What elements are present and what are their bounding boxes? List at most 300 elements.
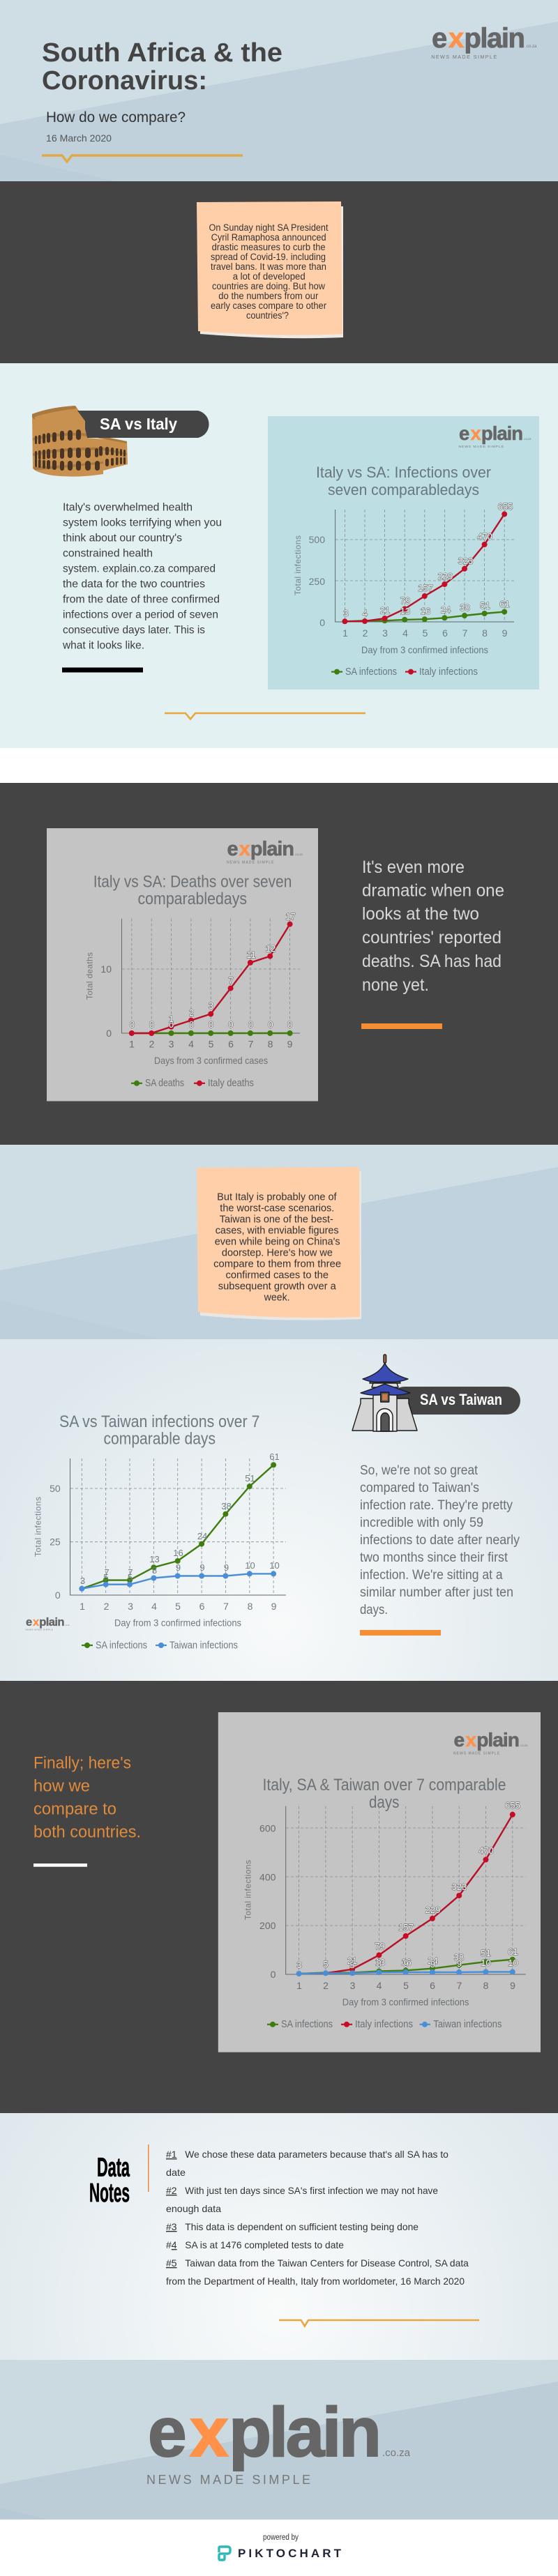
icon: Taiwan memorial hall (352, 1355, 417, 1431)
data labels: 0 (130, 1019, 135, 1030)
chart title: SA vs Taiwan infections over 7 (59, 1412, 259, 1431)
line: Italy infections (299, 1812, 515, 1974)
axis labels: 5 (423, 627, 428, 639)
notes list: from the Department of Health, Italy from worldometer, 16 March 2020 (166, 2276, 465, 2287)
notes list (166, 2149, 469, 2287)
note text (213, 1192, 341, 1304)
axis labels: 7 (248, 1039, 254, 1050)
chart: SA vs Taiwan infections (26, 1412, 286, 1651)
body text: Italy: consecutive days later. This is (63, 625, 205, 636)
data labels: 61 (508, 1946, 518, 1957)
data labels: 470 (478, 1845, 494, 1856)
body text: deaths: looks at the two (362, 904, 479, 924)
logo: explain chart 2: e (227, 838, 239, 860)
title: South Africa & the (42, 38, 282, 68)
data labels: 9 (199, 1562, 205, 1573)
body text: deaths (362, 858, 504, 995)
axis labels: 1 (296, 1980, 302, 1991)
body text: Taiwan: So, we're not so great (360, 1463, 478, 1478)
body text: deaths: countries' reported (362, 928, 502, 947)
axis labels: 9 (510, 1980, 515, 1991)
axis labels: 8 (268, 1039, 273, 1050)
axis labels: 500 (309, 534, 325, 545)
body text: finally (33, 1754, 141, 1841)
logo: explain chart 2: x (239, 838, 250, 860)
axis labels: Total deaths (85, 952, 95, 1000)
data labels: 10 (508, 1958, 518, 1968)
notes list: SA is at 1476 completed tests to date (185, 2239, 344, 2250)
logo: explain large: .co.za (382, 2447, 411, 2459)
axis labels: 1 (129, 1039, 135, 1050)
axis labels: 5 (403, 1980, 409, 1991)
body text: Taiwan: days. (360, 1603, 388, 1617)
legend: SA deaths (145, 1077, 184, 1089)
legend (331, 666, 478, 678)
data labels: 0 (287, 1019, 292, 1030)
data labels: 323 (452, 1882, 467, 1892)
logo: explain header: plain (464, 23, 525, 54)
data labels: 0 (149, 1019, 154, 1030)
logo: explain chart 2 (227, 838, 303, 865)
axis labels (243, 1822, 515, 2008)
chart title: Italy, SA & Taiwan over 7 comparable (262, 1776, 506, 1794)
chart: Italy vs SA infections (268, 416, 539, 689)
axis labels: 200 (259, 1920, 276, 1931)
notes list: date (166, 2167, 186, 2178)
axis labels: 8 (483, 1980, 489, 1991)
chart title (316, 464, 491, 498)
logo: explain header: e (432, 23, 447, 54)
data labels: 157 (398, 1922, 414, 1933)
legend: Italy infections (355, 2018, 413, 2030)
orange divider (148, 2144, 149, 2192)
body text: Italy: from the date of three confirmed (63, 594, 220, 605)
axis labels: 5 (175, 1601, 181, 1612)
data labels: 323 (458, 556, 473, 566)
panel: Italy vs SA deaths (0, 783, 558, 1145)
axis labels: 3 (350, 1980, 356, 1991)
line: Italy infections (342, 511, 507, 624)
line: Taiwan infections (296, 1969, 515, 1976)
data labels: 24 (441, 604, 451, 615)
data labels: 0 (169, 1019, 174, 1030)
chart title: seven comparabledays (328, 481, 479, 498)
body text: deaths: It's even more (362, 858, 465, 877)
legend: Taiwan infections (433, 2018, 502, 2030)
data labels (343, 501, 513, 618)
note text: countries are doing. But how (212, 281, 325, 291)
logo: explain chart 3 (26, 1615, 70, 1631)
data labels: 9 (430, 1959, 435, 1969)
subtitle: How do we compare? (46, 109, 186, 125)
data labels: 7 (128, 1567, 133, 1578)
axis labels: 6 (228, 1039, 234, 1050)
logo: explain chart 3: NEWS MADE SIMPLE (26, 1629, 53, 1631)
panel: both countries (0, 1681, 558, 2113)
note text: do the numbers from our (218, 291, 319, 301)
logo: explain chart 3: .co.za (65, 1624, 70, 1626)
data labels: 7 (104, 1567, 110, 1578)
data labels: 51 (480, 600, 490, 611)
note text: doorstep. Here's how we (222, 1248, 333, 1259)
legend (267, 2018, 502, 2030)
data labels: 51 (245, 1473, 255, 1484)
data labels: 79 (375, 1941, 385, 1951)
axis labels: 0 (55, 1590, 61, 1601)
data labels: 16 (173, 1548, 183, 1558)
logo: explain chart 4: NEWS MADE SIMPLE (453, 1751, 500, 1755)
note paper (200, 206, 343, 338)
note text: But Italy is probably one of (217, 1192, 338, 1203)
note text: On Sunday night SA President (209, 222, 329, 233)
data labels: 8 (152, 1565, 157, 1576)
note text: drastic measures to curb the (212, 242, 326, 252)
data labels (80, 1451, 280, 1586)
data labels: 0 (248, 1019, 253, 1030)
orange marker line (165, 713, 365, 719)
pill heading: SA vs Italy: SA vs Italy (100, 415, 177, 433)
body text: finally: how we (33, 1776, 90, 1795)
data labels: 38 (454, 1952, 464, 1963)
note text: confirmed cases to the (226, 1270, 329, 1281)
logo: explain large (146, 2393, 411, 2487)
axis labels: 2 (149, 1039, 155, 1050)
data labels: 10 (481, 1958, 491, 1968)
data labels: 0 (209, 1019, 213, 1030)
orange marker line (279, 2320, 479, 2326)
panel: footer logo (0, 2360, 558, 2520)
note text (209, 222, 329, 321)
legend: SA infections (96, 1640, 147, 1651)
body text: Taiwan: similar number after just ten (360, 1585, 513, 1600)
body text: Italy: constrained health (63, 548, 153, 559)
data labels: 157 (418, 583, 433, 593)
panel: intro note section (0, 181, 558, 363)
axis labels: 0 (271, 1969, 276, 1980)
logo: explain chart 3: e (26, 1615, 32, 1629)
axis labels (293, 534, 508, 655)
body text: finally: both countries. (33, 1822, 141, 1841)
black bar (62, 668, 143, 672)
axis labels: 3 (169, 1039, 174, 1050)
axis labels: 4 (151, 1601, 157, 1612)
axis labels: 4 (188, 1039, 194, 1050)
note text: even while being on China's (215, 1237, 340, 1248)
data labels: 0 (228, 1019, 234, 1030)
pill heading: SA vs Taiwan (391, 1387, 520, 1415)
legend: SA infections (345, 666, 397, 678)
body text: finally: Finally; here's (33, 1754, 131, 1773)
data labels: 10 (269, 1560, 280, 1571)
logo: explain chart 3: x (33, 1615, 40, 1629)
data labels: 3 (343, 608, 349, 618)
data labels: 13 (149, 1554, 160, 1564)
body text: Italy: what it looks like. (62, 640, 144, 651)
data labels: 12 (266, 943, 276, 954)
title (42, 38, 282, 96)
note text: Taiwan is one of the best- (220, 1214, 333, 1226)
line: Taiwan infections (79, 1571, 276, 1592)
orange bar (361, 1023, 442, 1029)
axis labels: 3 (128, 1601, 133, 1612)
data labels: 5 (128, 1572, 133, 1583)
chart: deaths (47, 828, 318, 1102)
chart title: comparable days (103, 1430, 216, 1449)
chart title: Italy vs SA: Deaths over seven (93, 873, 292, 892)
axis labels: 7 (223, 1601, 229, 1612)
axis labels: 400 (259, 1871, 276, 1882)
data labels: 7 (228, 975, 234, 986)
panel: SA vs Italy (0, 363, 558, 748)
axis labels: 600 (259, 1822, 276, 1834)
data labels: 16 (421, 606, 430, 616)
data labels: 21 (380, 605, 390, 616)
logo: explain large: x (190, 2393, 229, 2471)
panel: SA vs Taiwan (0, 1339, 558, 1681)
data labels (130, 911, 296, 1030)
body text: Italy: Italy's overwhelmed health (63, 502, 193, 513)
logo: explain chart 1: x (470, 422, 481, 444)
line: SA deaths (132, 1030, 293, 1036)
logo: explain header (431, 23, 537, 60)
panel: piktochart footer (0, 2520, 558, 2576)
logo: explain chart 4: x (465, 1728, 476, 1751)
axis labels: Total infections (33, 1497, 43, 1557)
axis labels: 6 (199, 1601, 205, 1612)
body text: Italy (62, 502, 222, 651)
line: Italy deaths (129, 922, 293, 1036)
axis labels: 7 (462, 627, 468, 639)
data labels: 3 (296, 1960, 302, 1970)
data labels: 655 (498, 501, 513, 512)
body text: Italy: think about our country's (63, 533, 182, 544)
logo: explain chart 4: e (453, 1728, 465, 1751)
body text: deaths: deaths. SA has had (362, 952, 502, 971)
logo: explain large: plain (229, 2393, 379, 2471)
axis labels: 2 (323, 1980, 329, 1991)
data labels: 4 (363, 608, 368, 618)
data labels: 61 (499, 599, 510, 609)
orange bar (360, 1630, 441, 1636)
body text: Taiwan (360, 1463, 520, 1617)
axis labels: 1 (342, 627, 348, 639)
legend (131, 1077, 254, 1089)
logo: explain header: .co.za (525, 45, 537, 49)
note text: compare to them from three (213, 1259, 341, 1270)
white bar (33, 1864, 87, 1867)
data labels: 1 (169, 1014, 174, 1024)
logo: explain chart 2: plain (250, 838, 294, 860)
legend (82, 1640, 238, 1651)
data labels: 0 (268, 1019, 273, 1030)
data labels: 10 (245, 1560, 255, 1571)
data labels: 21 (347, 1956, 357, 1966)
logo: explain large: NEWS MADE SIMPLE (146, 2473, 310, 2487)
panel: header (0, 0, 558, 181)
body text: Taiwan: infection rate. They're pretty (360, 1498, 513, 1513)
axis labels: Days from 3 confirmed cases (154, 1055, 268, 1066)
pill heading: SA vs Taiwan: SA vs Taiwan (420, 1391, 502, 1408)
data labels: 38 (221, 1501, 232, 1511)
body text: Taiwan: two months since their first (360, 1550, 508, 1565)
data labels (296, 1800, 520, 1970)
note text: a lot of developed (233, 271, 306, 282)
note text: the worst-case scenarios. (220, 1203, 334, 1214)
data labels: 17 (285, 911, 296, 922)
logo: explain header: NEWS MADE SIMPLE (431, 54, 497, 60)
data labels: 13 (400, 606, 410, 616)
chart title: comparabledays (138, 890, 247, 908)
panel: data notes (0, 2113, 558, 2360)
data labels: 5 (103, 1572, 109, 1583)
legend: Italy infections (419, 666, 478, 678)
logo: explain chart 1: e (459, 422, 469, 444)
chart title (262, 1776, 506, 1812)
body text: Italy: the data for the two countries (63, 579, 205, 590)
icon: piktochart mark (219, 2547, 230, 2560)
line: SA infections (345, 609, 507, 623)
powered by: powered by (263, 2533, 299, 2542)
data labels: 61 (269, 1451, 280, 1462)
logo: explain chart 4: .co.za (520, 1744, 528, 1747)
data labels: 229 (425, 1905, 440, 1915)
notes list: #3 (166, 2221, 177, 2232)
legend: Taiwan infections (169, 1640, 238, 1651)
line: SA infections (299, 1957, 515, 1974)
body text: Italy: system looks terrifying when you (63, 517, 222, 528)
data labels: 24 (428, 1956, 438, 1966)
axis labels: 8 (248, 1601, 253, 1612)
axis labels: Day from 3 confirmed infections (114, 1617, 241, 1629)
body text: Taiwan: incredible with only 59 (360, 1516, 483, 1530)
data labels: 655 (505, 1800, 520, 1811)
axis labels: Day from 3 confirmed infections (342, 1997, 469, 2008)
note text: Cyril Ramaphosa announced (211, 232, 326, 243)
data labels: 9 (403, 1958, 409, 1969)
axis labels: 1 (80, 1601, 85, 1612)
chart title: days (369, 1793, 399, 1812)
axis labels: 250 (309, 576, 325, 587)
axis labels: Day from 3 confirmed infections (361, 644, 488, 655)
data labels: 470 (477, 531, 492, 542)
axis labels (33, 1483, 277, 1629)
logo: explain chart 2: NEWS MADE SIMPLE (227, 861, 274, 865)
note text: countries'? (246, 310, 289, 321)
data labels: 51 (481, 1948, 491, 1958)
logo: explain chart 4 (453, 1728, 528, 1755)
axis labels: Total infections (293, 535, 303, 595)
data labels: 5 (323, 1959, 329, 1969)
axis labels: 2 (104, 1601, 110, 1612)
axis labels: 5 (209, 1039, 214, 1050)
data labels: 2 (189, 1007, 194, 1018)
logo: explain chart 3: plain (39, 1615, 64, 1629)
note paper (200, 1171, 361, 1320)
line: SA infections (82, 1462, 276, 1589)
data labels: 5 (349, 1960, 355, 1970)
note text: spread of Covid-19. including (211, 252, 326, 262)
notes list: With just ten days since SA's first infection we may not have (185, 2185, 438, 2196)
panel: Taiwan note section (0, 1145, 558, 1339)
logo: explain chart 4: plain (476, 1728, 519, 1751)
logo: explain chart 1: plain (481, 422, 522, 444)
axis labels: 10 (100, 963, 112, 975)
body text: Taiwan: infection. We're sitting at a (360, 1568, 503, 1583)
body text: Taiwan: compared to Taiwan's (360, 1481, 479, 1495)
title: Coronavirus: (42, 66, 207, 96)
date: 16 March 2020 (46, 132, 112, 144)
data labels: 9 (176, 1562, 181, 1573)
data labels: 229 (438, 571, 453, 581)
axis labels: 2 (363, 627, 368, 639)
axis labels: 9 (502, 627, 508, 639)
pill heading: SA vs Italy (77, 411, 209, 438)
axis labels: 50 (50, 1483, 61, 1494)
note text: week. (264, 1293, 290, 1304)
data labels: 13 (375, 1957, 385, 1967)
axis labels: 8 (482, 627, 488, 639)
data labels: 11 (246, 950, 256, 960)
chart title: Italy vs SA: Infections over (316, 464, 491, 481)
logo: explain large: e (148, 2393, 187, 2471)
axis labels: 6 (442, 627, 448, 639)
axis labels: 9 (271, 1601, 277, 1612)
icon: colosseum (32, 406, 128, 477)
chart title (59, 1412, 259, 1449)
notes list: #1 (166, 2149, 177, 2160)
notes list: enough data (166, 2203, 221, 2214)
logo: explain chart 1: .co.za (523, 437, 531, 441)
chart title (93, 873, 292, 908)
logo: explain chart 1 (458, 422, 531, 449)
logo: explain header: x (448, 23, 464, 54)
heading: Data Notes (89, 2153, 130, 2208)
data labels: 8 (377, 1958, 382, 1969)
note text: early cases compare to other (211, 300, 326, 311)
data labels: 3 (80, 1576, 85, 1586)
notes list: #4 (166, 2239, 177, 2250)
body text: Italy: infections over a period of seven (63, 609, 218, 620)
axis labels: 9 (287, 1039, 293, 1050)
piktochart wordmark: PIKTOCHART (238, 2547, 342, 2560)
note text: travel bans. It was more than (211, 261, 326, 272)
notes list: This data is dependent on sufficient testing being done (185, 2221, 418, 2232)
axis labels: Total infections (243, 1860, 253, 1920)
legend: Italy deaths (208, 1077, 254, 1089)
axis labels: 0 (106, 1028, 112, 1039)
axis labels (85, 952, 293, 1066)
logo: explain chart 1: NEWS MADE SIMPLE (458, 445, 504, 449)
chart: Italy, SA and Taiwan (218, 1712, 541, 2052)
data labels: 3 (209, 1000, 213, 1011)
body text: Taiwan: infections to date after nearly (360, 1533, 520, 1548)
notes list: #5 (166, 2257, 177, 2269)
data labels: 79 (400, 595, 410, 606)
note text: cases, with enviable figures (216, 1226, 339, 1237)
body text: Italy: system. explain.co.za compared (63, 563, 216, 574)
notes list: #2 (166, 2185, 177, 2196)
data labels: 9 (457, 1958, 462, 1969)
data labels: 16 (401, 1957, 412, 1967)
legend: SA infections (281, 2018, 333, 2030)
data labels: 9 (224, 1562, 229, 1573)
heading: Data Notes: Data (97, 2153, 130, 2182)
notes list: Taiwan data from the Taiwan Centers for Disease Control, SA data (185, 2257, 469, 2269)
notes list: We chose these data parameters because that's all SA has to (185, 2149, 448, 2160)
body text: finally: compare to (33, 1800, 116, 1819)
axis labels: 3 (382, 627, 388, 639)
axis labels: 6 (430, 1980, 435, 1991)
